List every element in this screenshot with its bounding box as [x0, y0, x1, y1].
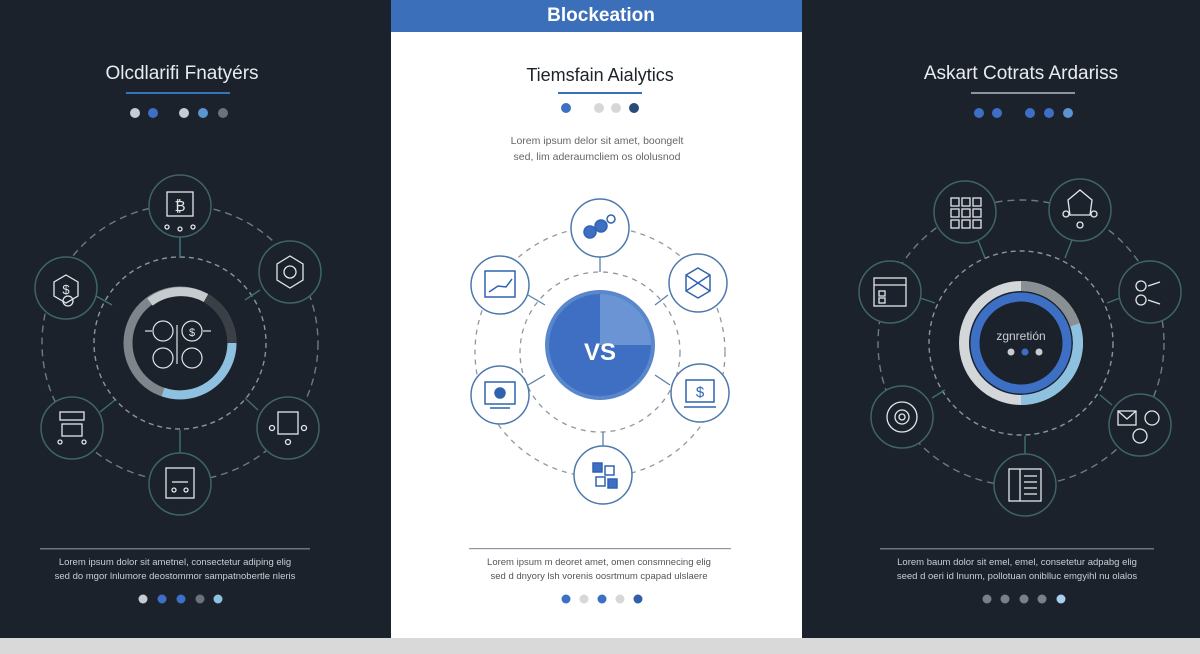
left diagram: $	[189, 327, 195, 339]
middle intro text: sed, lim aderaumcliem os ololusnod	[514, 151, 681, 163]
panel: left dark	[0, 0, 391, 638]
panel: middle white: Blockeation	[547, 5, 655, 26]
header bar	[391, 0, 802, 32]
center label: zgnretión	[996, 329, 1046, 343]
panel: left dark: $	[62, 282, 70, 297]
left top dots	[130, 108, 228, 118]
middle intro text	[511, 135, 683, 163]
middle intro text: Lorem ipsum delor sit amet, boongelt	[511, 135, 683, 147]
middle body text: sed d dnyory lsh vorenis oosrtmum cpapad ulslaere	[490, 571, 708, 582]
left body text: sed do mgor lnlumore deostommor sampatnobertle nleris	[55, 571, 296, 582]
left diagram	[42, 205, 318, 481]
panel: middle white	[391, 0, 802, 638]
middle title: Tiemsfain Aialytics	[526, 65, 674, 85]
VS center	[547, 292, 653, 398]
panel: left dark: ₿	[174, 198, 186, 215]
middle top dots	[561, 103, 639, 113]
right bottom dots	[982, 594, 1066, 604]
middle diagram	[475, 227, 725, 477]
left bottom dots	[138, 594, 222, 604]
right title: Askart Cotrats Ardariss	[924, 63, 1118, 84]
right top dots	[974, 108, 1073, 118]
left title: Olcdlarifi Fnatyérs	[105, 63, 259, 84]
middle body text: Lorem ipsum m deoret amet, omen consmnecing elig	[487, 557, 711, 568]
right body text	[897, 557, 1137, 582]
middle bottom dots	[562, 594, 642, 604]
right body text: seed d oeri id lnunm, pollotuan oniblluc emgyihl nu olalos	[897, 571, 1137, 582]
right diagram	[878, 200, 1164, 486]
middle body text	[487, 557, 711, 582]
left body text: Lorem ipsum dolor sit ametnel, consectetur adiping elig	[59, 557, 291, 568]
right center ring	[964, 286, 1078, 400]
middle icon nodes	[471, 199, 729, 504]
VS center: VS	[584, 339, 616, 366]
panel: middle white: $	[696, 384, 705, 401]
center ring	[128, 291, 232, 395]
right body text: Lorem baum dolor sit emel, emel, consetetur adpabg elig	[897, 557, 1137, 568]
right icon nodes	[859, 179, 1181, 516]
icon nodes left	[35, 175, 321, 515]
left body text	[55, 557, 296, 582]
panel: right dark	[802, 0, 1200, 638]
